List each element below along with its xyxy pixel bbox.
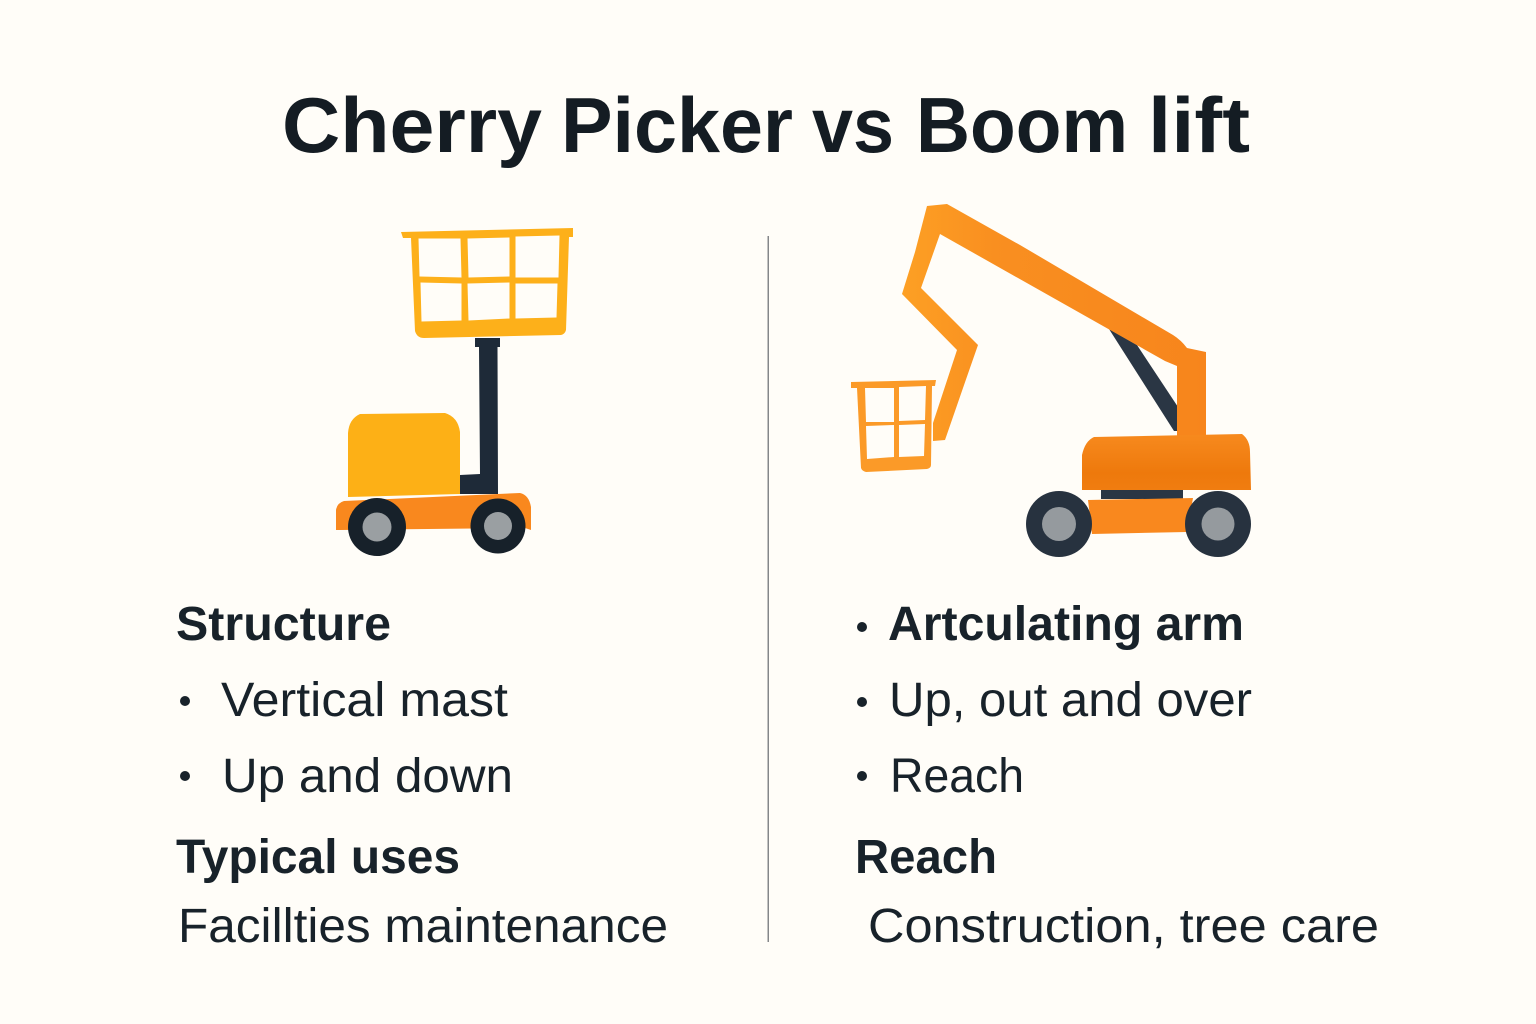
- panel: boom lift text: [855, 598, 1379, 953]
- bullet: up and down: Up and down: [222, 750, 513, 803]
- bullet: vertical mast: Vertical mast: [221, 674, 508, 727]
- bullet: up, out and over: Up, out and over: [889, 674, 1252, 727]
- heading: reach: Reach: [855, 831, 997, 884]
- boom lift strut: [1109, 329, 1178, 431]
- icon: boom lift: [851, 204, 1251, 557]
- title: [282, 81, 1250, 169]
- heading: structure: Structure: [176, 598, 391, 651]
- title: vs: [812, 81, 894, 169]
- title: lift: [1148, 81, 1250, 169]
- boom lift basket: [851, 380, 936, 472]
- heading: typical uses: Typical uses: [176, 831, 460, 884]
- cherry picker chassis: [336, 493, 531, 530]
- boom lift articulating arm: [902, 204, 1206, 441]
- boom lift chassis: [1088, 498, 1193, 534]
- cherry picker cab: [348, 413, 460, 497]
- cherry picker front wheel: [348, 498, 406, 556]
- title: Picker: [561, 81, 793, 169]
- panel: cherry picker text: [176, 598, 668, 953]
- cherry picker rear wheel: [470, 498, 526, 554]
- text: facilities maintenance: Facillties maintenance: [178, 900, 668, 953]
- cherry picker basket: [401, 228, 573, 338]
- boom lift left wheel: [1026, 491, 1092, 557]
- boom lift right wheel: [1185, 491, 1251, 557]
- center divider: [768, 236, 769, 942]
- icon: cherry picker: [336, 228, 573, 556]
- cherry picker mast: [460, 338, 500, 494]
- bullet: reach: Reach: [890, 750, 1024, 803]
- bullet: articulating arm: Artculating arm: [888, 598, 1244, 651]
- boom lift upper body: [1082, 434, 1251, 490]
- text: construction, tree care: Construction, tree care: [868, 900, 1379, 953]
- title: Cherry: [282, 81, 542, 169]
- boom lift turntable: [1101, 490, 1183, 499]
- title: Boom: [916, 81, 1128, 169]
